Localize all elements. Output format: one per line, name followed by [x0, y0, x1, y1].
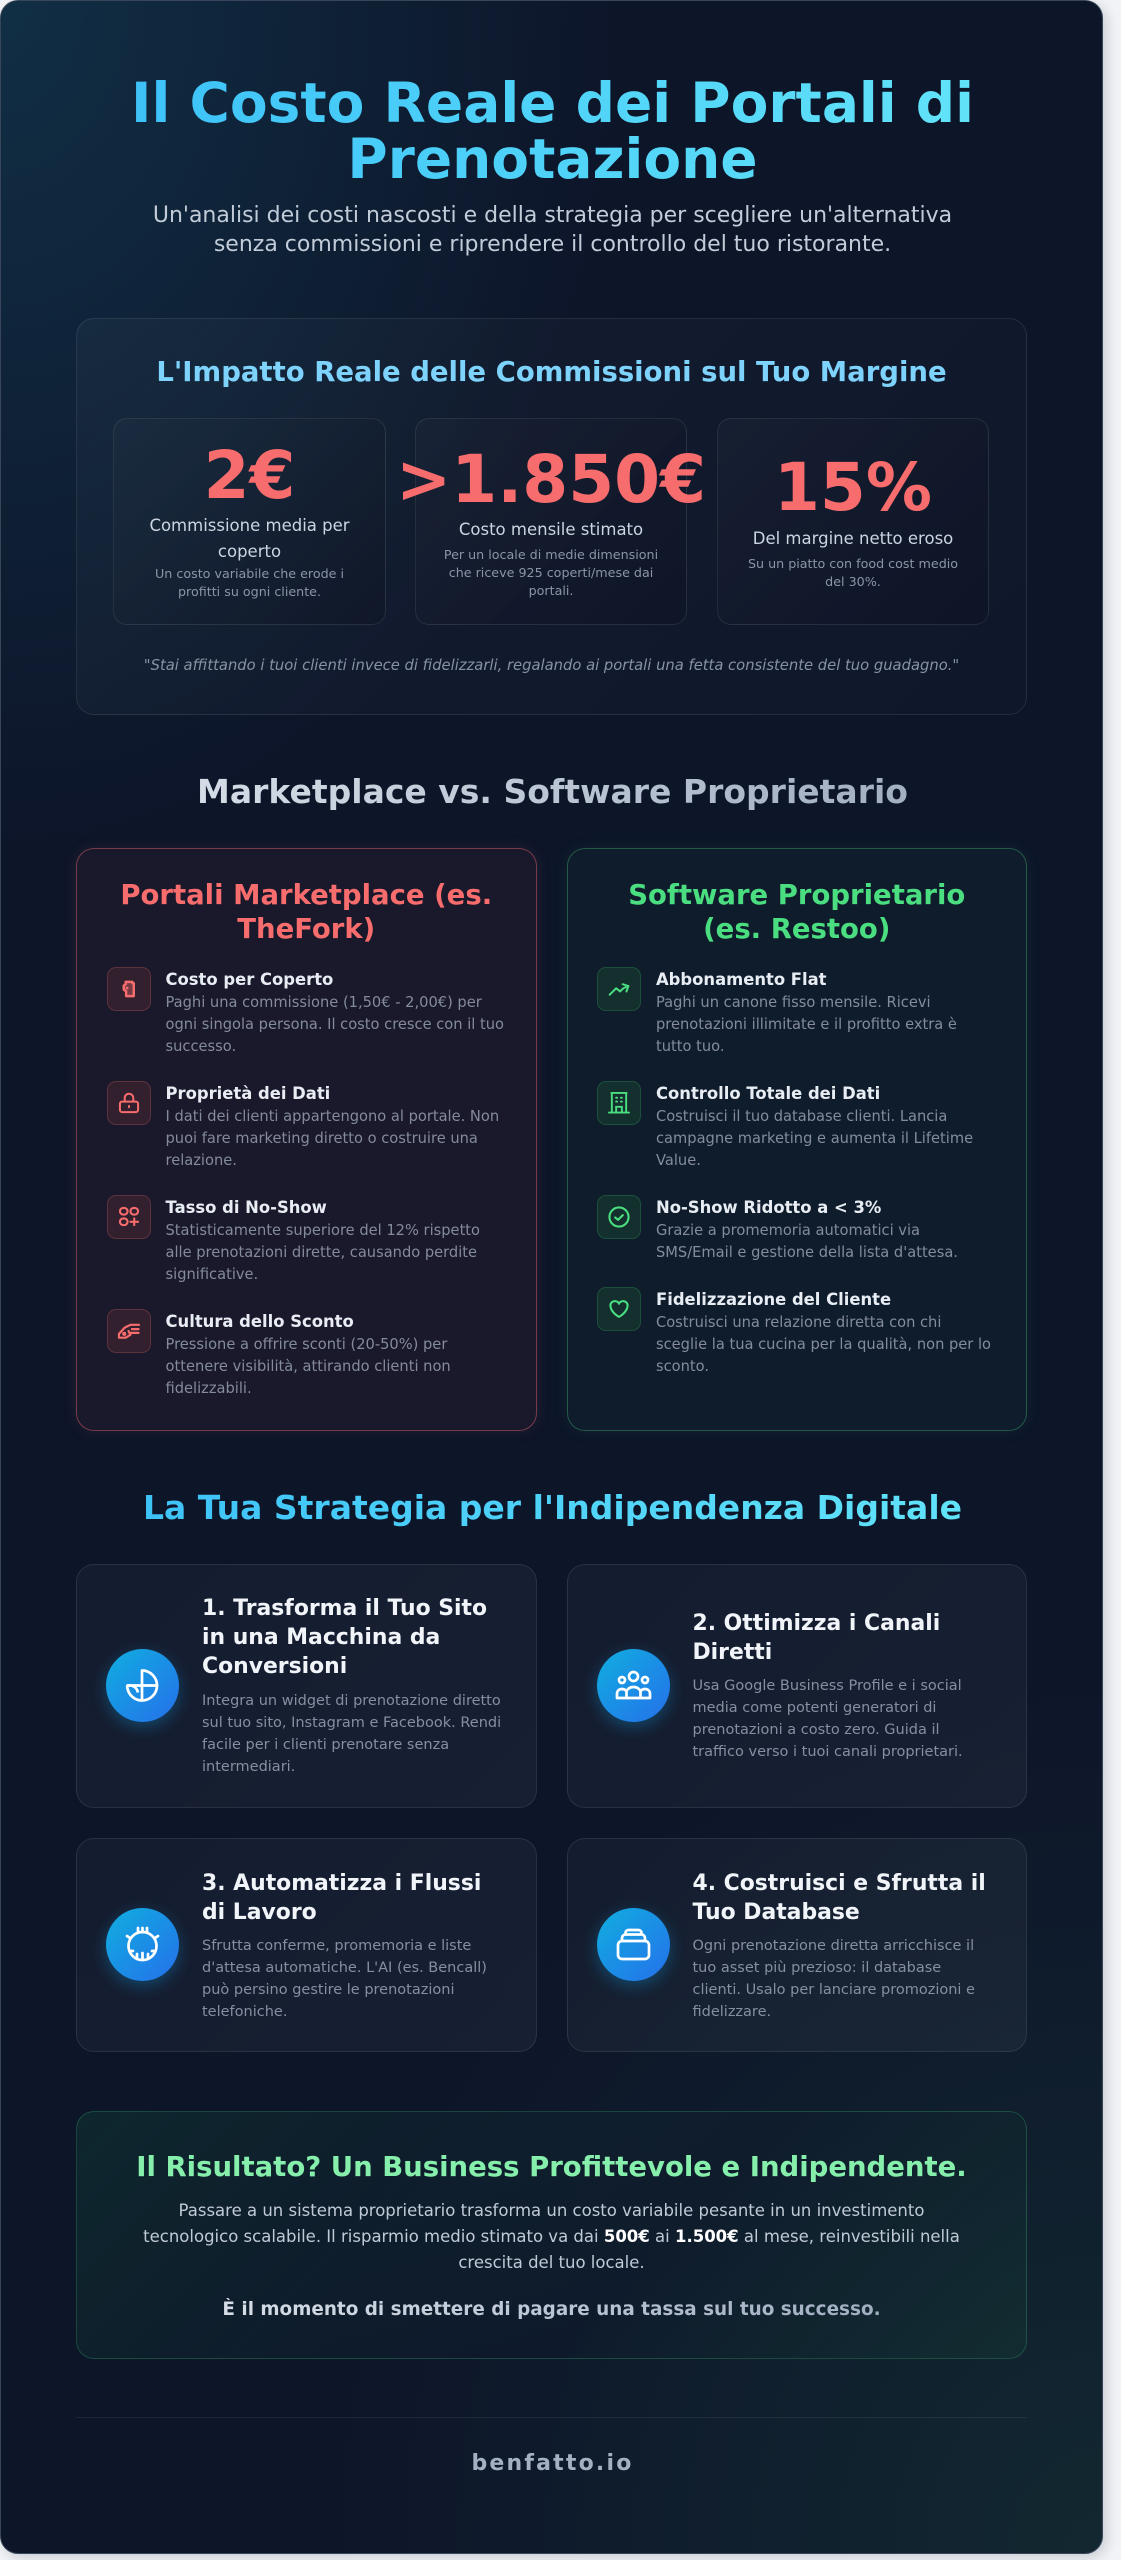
panel: proprietary software: [566, 848, 1027, 1431]
stat label: Del margine netto eroso: [753, 529, 953, 548]
card text: traffico verso i tuoi canali proprietari.: [692, 1744, 963, 1760]
item text: Statisticamente superiore del 12% rispetto: [166, 1222, 480, 1239]
stat label: [149, 516, 350, 561]
item text: sceglie la tua cucina per la qualità, non per lo: [656, 1336, 991, 1353]
card: strategy 3: [76, 1838, 536, 2052]
item title: Costo per Coperto: [166, 970, 333, 989]
panel heading: [628, 879, 965, 945]
card text: media come potenti generatori di: [692, 1700, 936, 1716]
icon: users: [596, 1649, 670, 1722]
stat note: profitti su ogni cliente.: [178, 584, 321, 599]
item text: [166, 1336, 451, 1397]
card title: Tuo Database: [692, 1900, 860, 1925]
panel: commission impact: [76, 318, 1027, 715]
stat note: del 30%.: [825, 574, 881, 589]
call to action: [77, 2298, 1026, 2322]
card title: [202, 1596, 487, 1679]
icon: pie chart: [106, 1649, 179, 1722]
card title: 2. Ottimizza i Canali: [692, 1610, 940, 1636]
heading: strategy: La Tua Strategia per l'Indipendenza Digitale: [143, 1488, 962, 1527]
result text: tecnologico scalabile. Il risparmio medio stimato va dai 500€ ai 1.500€ al mese, reinvestibili nella: [143, 2227, 960, 2246]
icon: tag: [106, 1309, 150, 1353]
card title: in una Macchina da: [202, 1625, 440, 1650]
item title: No-Show Ridotto a < 3%: [656, 1198, 881, 1217]
stat note: Su un piatto con food cost medio: [748, 556, 958, 571]
icon: heart: [597, 1287, 641, 1331]
title: [1, 75, 1104, 187]
item text: tutto tuo.: [656, 1038, 724, 1055]
card text: intermediari.: [202, 1759, 295, 1775]
card text: [692, 1938, 975, 2020]
stat note: [748, 556, 958, 589]
item: reduced no-show: [597, 1195, 958, 1261]
icon: database: [596, 1908, 670, 1981]
card title: [692, 1870, 986, 1925]
item text: relazione.: [166, 1152, 237, 1169]
item text: Pressione a offrire sconti (20-50%) per: [166, 1336, 447, 1353]
item text: fidelizzabili.: [166, 1380, 252, 1397]
icon: automation: [106, 1908, 179, 1981]
panel heading: TheFork): [237, 913, 375, 945]
item: data ownership: [107, 1081, 499, 1169]
card text: Ogni prenotazione diretta arricchisce il: [692, 1938, 974, 1954]
card text: [692, 1678, 963, 1760]
card title: Diretti: [692, 1640, 772, 1665]
quote: "Stai affittando i tuoi clienti invece di fidelizzarli, regalando ai portali una fetta consistente del tuo guadagno.": [144, 657, 959, 674]
item text: [656, 1314, 991, 1375]
item text: alle prenotazioni dirette, causando perdite: [166, 1244, 477, 1261]
stat value: 15%: [774, 449, 932, 526]
item text: [656, 994, 957, 1055]
stat card: 1850 euro: [415, 418, 687, 625]
stat label: coperto: [218, 542, 281, 561]
item text: puoi fare marketing diretto o costruire una: [166, 1130, 478, 1147]
card title: Conversioni: [202, 1654, 347, 1679]
title: Il Costo Reale dei Portali di: [131, 71, 974, 135]
item text: Grazie a promemoria automatici via: [656, 1222, 920, 1239]
item title: Fidelizzazione del Cliente: [656, 1290, 891, 1309]
icon: cost: [106, 967, 150, 1011]
card text: [202, 1938, 487, 2020]
item text: Paghi un canone fisso mensile. Ricevi: [656, 994, 931, 1011]
card: strategy 2: [566, 1564, 1027, 1808]
card text: facile per i clienti prenotare senza: [202, 1737, 449, 1753]
panel: marketplace portals: [76, 848, 536, 1431]
stat value: 2€: [204, 437, 295, 514]
card title: 3. Automatizza i Flussi: [202, 1870, 481, 1896]
stat note: [444, 547, 658, 598]
item text: Costruisci il tuo database clienti. Lancia: [656, 1108, 947, 1125]
card text: Integra un widget di prenotazione diretto: [202, 1693, 501, 1709]
stat note: [155, 566, 344, 599]
stat label: Costo mensile stimato: [459, 520, 643, 539]
card text: può persino gestire le prenotazioni: [202, 1982, 454, 1998]
heading: marketplace vs software: Marketplace vs. Software Proprietario: [197, 772, 908, 811]
item text: sconto.: [656, 1358, 709, 1375]
item title: Proprietà dei Dati: [166, 1084, 330, 1103]
card title: 4. Costruisci e Sfrutta il: [692, 1870, 986, 1896]
card title: 1. Trasforma il Tuo Sito: [202, 1596, 487, 1620]
subtitle: [153, 203, 952, 257]
heading: marketplace vs software: [1, 770, 1104, 814]
card title: [202, 1870, 481, 1925]
card text: d'attesa automatiche. L'AI (es. Bencall): [202, 1960, 487, 1976]
panel: result: [76, 2111, 1027, 2359]
card: strategy 1: [76, 1564, 536, 1808]
stat label: Commissione media per: [149, 516, 350, 535]
item text: campagne marketing e aumenta il Lifetime: [656, 1130, 973, 1147]
subtitle: senza commissioni e riprendere il controllo del tuo ristorante.: [214, 232, 891, 257]
stat card: 2 euro: [113, 418, 386, 625]
icon: trending up: [597, 967, 641, 1011]
item title: Abbonamento Flat: [656, 970, 827, 989]
item text: [656, 1222, 958, 1261]
item: cost per cover: [107, 967, 504, 1055]
item text: prenotazioni illimitate e il profitto extra è: [656, 1016, 957, 1033]
item: flat subscription: [597, 967, 957, 1055]
item text: I dati dei clienti appartengono al portale. Non: [166, 1108, 499, 1125]
card text: tuo asset più prezioso: il database: [692, 1960, 941, 1976]
panel heading: [120, 879, 492, 945]
item: customer loyalty: [597, 1287, 991, 1375]
card: strategy 4: [566, 1838, 1027, 2052]
result text: [143, 2201, 960, 2272]
card text: prenotazioni a costo zero. Guida il: [692, 1722, 940, 1738]
item text: ogni singola persona. Il costo cresce con il tuo: [166, 1016, 504, 1033]
icon: lock: [106, 1081, 150, 1125]
card text: Usa Google Business Profile e i social: [692, 1678, 962, 1694]
item: total data control: [597, 1081, 973, 1169]
card title: di Lavoro: [202, 1900, 317, 1925]
call to action: È il momento di smettere di pagare una tassa sul tuo successo.: [222, 2299, 881, 2320]
result heading: Il Risultato? Un Business Profittevole e Indipendente.: [136, 2151, 967, 2183]
item text: [166, 1108, 499, 1169]
heading: commission impact: L'Impatto Reale delle Commissioni sul Tuo Margine: [156, 356, 947, 388]
stat card: 15 percent: [717, 418, 989, 625]
item text: successo.: [166, 1038, 236, 1055]
panel heading: (es. Restoo): [703, 913, 890, 945]
result text: Passare a un sistema proprietario trasforma un costo variabile pesante in un investimento: [179, 2201, 924, 2220]
stat note: Per un locale di medie dimensioni: [444, 547, 658, 562]
stat note: portali.: [529, 583, 573, 598]
icon: building: [597, 1081, 641, 1125]
stat note: che riceve 925 coperti/mese dai: [449, 565, 653, 580]
item: discount culture: [107, 1309, 451, 1397]
card title: [692, 1610, 940, 1665]
card text: clienti. Usalo per lanciare promozioni e: [692, 1982, 975, 1998]
icon: check circle: [597, 1195, 641, 1239]
panel heading: Portali Marketplace (es.: [120, 879, 492, 911]
result text: crescita del tuo locale.: [458, 2253, 645, 2272]
subtitle: Un'analisi dei costi nascosti e della strategia per scegliere un'alternativa: [153, 203, 952, 228]
item text: Costruisci una relazione diretta con chi: [656, 1314, 941, 1331]
item text: [166, 994, 504, 1055]
card text: fidelizzare.: [692, 2004, 771, 2020]
stat note: Un costo variabile che erode i: [155, 566, 344, 581]
stat value: >1.850€: [396, 441, 706, 518]
card text: sul tuo sito, Instagram e Facebook. Rendi: [202, 1715, 501, 1731]
footer brand: benfatto.io: [471, 2451, 634, 2476]
icon: grid plus: [106, 1195, 150, 1239]
item title: Tasso di No-Show: [166, 1198, 327, 1217]
item text: SMS/Email e gestione della lista d'attesa.: [656, 1244, 958, 1261]
item: no-show rate: [107, 1195, 480, 1283]
item title: Controllo Totale dei Dati: [656, 1084, 880, 1103]
item text: significative.: [166, 1266, 258, 1283]
item text: [166, 1222, 480, 1283]
card text: telefoniche.: [202, 2004, 287, 2020]
title: Prenotazione: [347, 127, 758, 191]
panel heading: Software Proprietario: [628, 879, 965, 911]
item text: [656, 1108, 973, 1169]
heading: strategy: [1, 1486, 1104, 1530]
item text: Value.: [656, 1152, 701, 1169]
item text: Paghi una commissione (1,50€ - 2,00€) per: [166, 994, 482, 1011]
item title: Cultura dello Sconto: [166, 1312, 354, 1331]
card text: Sfrutta conferme, promemoria e liste: [202, 1938, 471, 1954]
item text: ottenere visibilità, attirando clienti non: [166, 1358, 451, 1375]
card text: [202, 1693, 501, 1775]
